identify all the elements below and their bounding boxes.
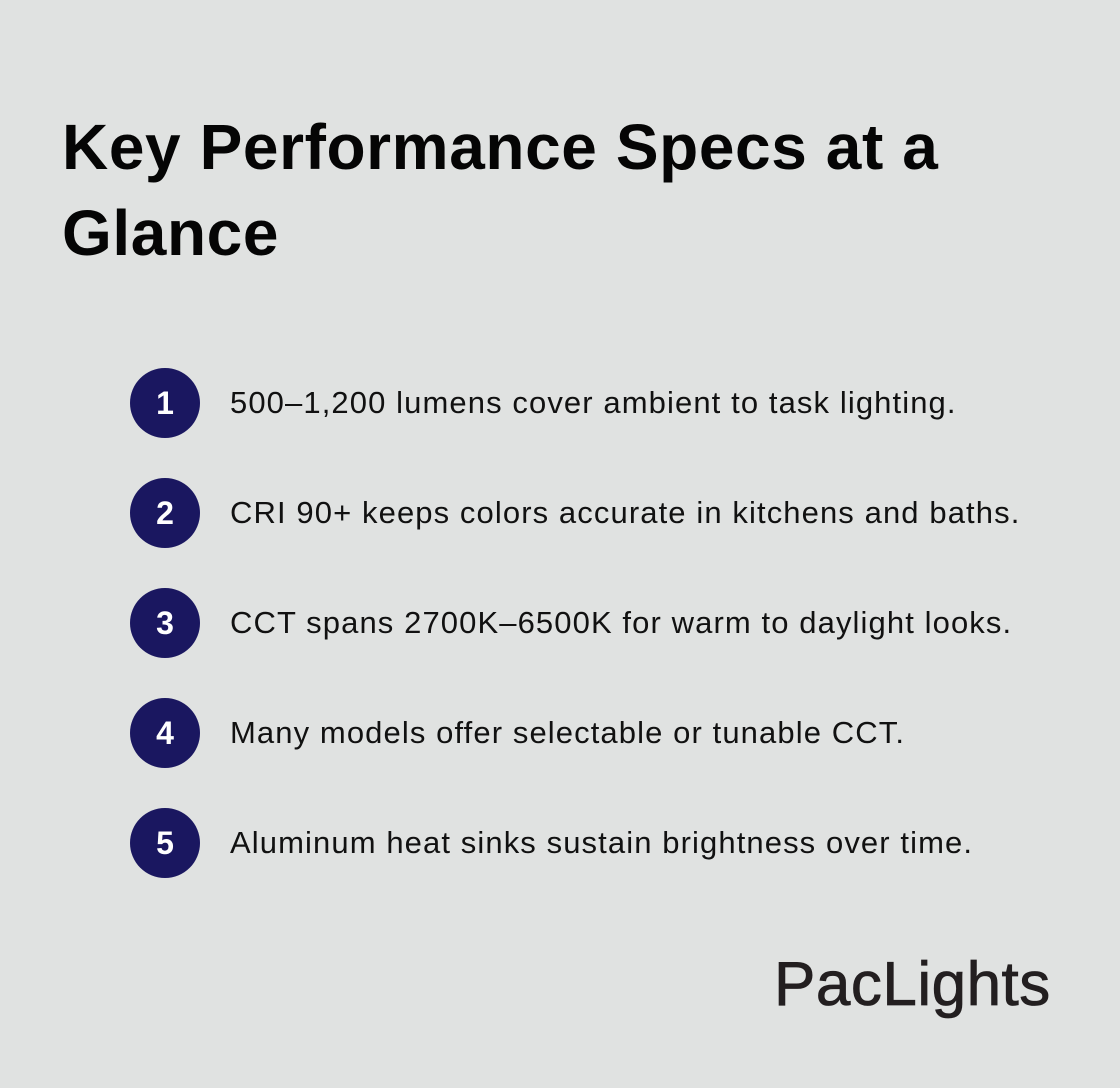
title (62, 111, 938, 269)
item 2: 2 (156, 495, 174, 531)
item 3 (130, 588, 1012, 658)
item 5: 5 (156, 825, 174, 861)
item 4 (130, 698, 905, 768)
logo: PacLights (774, 950, 1051, 1019)
item 5: Aluminum heat sinks sustain brightness over time. (230, 825, 973, 860)
item 4: Many models offer selectable or tunable CCT. (230, 715, 905, 750)
item 4: 4 (156, 715, 174, 751)
title: Key Performance Specs at a (62, 111, 938, 183)
item 3: 3 (156, 605, 174, 641)
item 1: 1 (156, 385, 174, 421)
item 1: 500–1,200 lumens cover ambient to task lighting. (230, 385, 957, 420)
item 2 (130, 478, 1020, 548)
item 2: CRI 90+ keeps colors accurate in kitchens and baths. (230, 495, 1020, 530)
item 1 (130, 368, 957, 438)
title: Glance (62, 197, 279, 269)
item 5 (130, 808, 973, 878)
item 3: CCT spans 2700K–6500K for warm to daylight looks. (230, 605, 1012, 640)
